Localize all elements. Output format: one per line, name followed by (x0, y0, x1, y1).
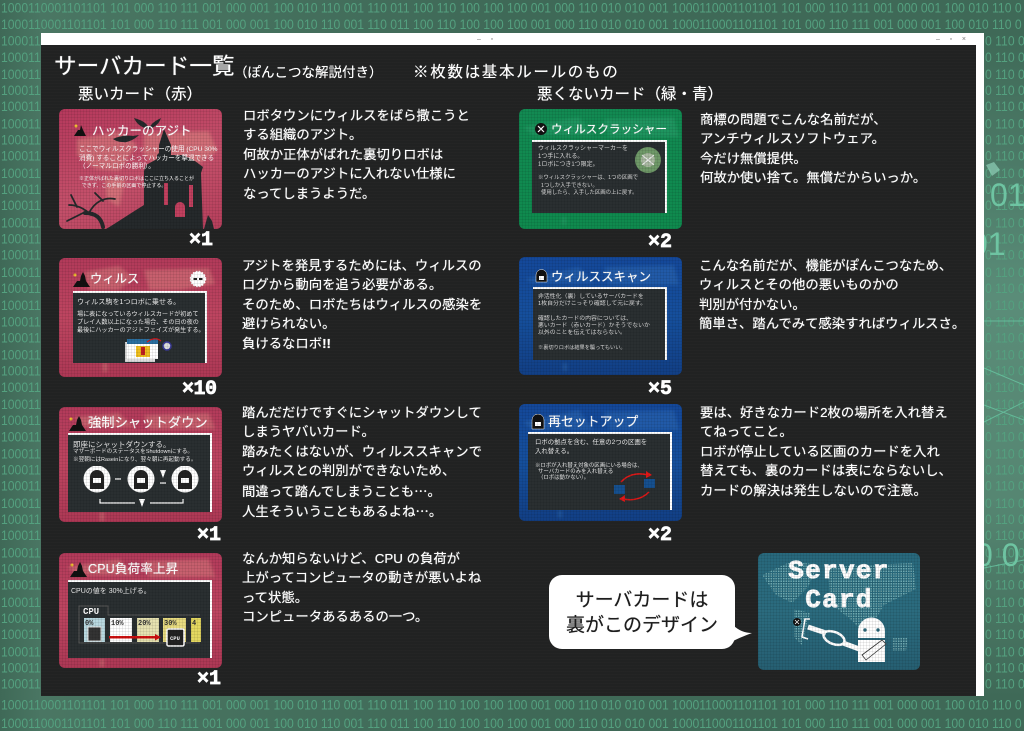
card: virus (59, 258, 222, 377)
background: binary code pattern: 1000110001101101 101 000 110 111 001 000 001 100 010 110 001 110 011 100 110 100 100 100 001 000 110 010 010 001 1000110001101101 101 000 110 111 001 000 001 100 010 110 0 1000110001101101 101 000 110 111 001 000 001 100 010 110 001 110 011 100 110 100 100 100 001 000 110 010 010 001 1000110001101101 101 000 110 111 001 000 001 100 010 110 0 (1, 0, 1022, 33)
description: virus scan: こんな名前だが、機能がぽんこつなため、 (699, 258, 952, 273)
callout: speech bubble: サーバカードは (576, 590, 708, 611)
icon: robot (532, 414, 544, 430)
CPU meter: 10% (111, 620, 124, 628)
description: re-setup: 要は、好きなカード2枚の場所を入れ替え (700, 405, 948, 420)
description: virus scan: ウィルスとその他の悪いものかの (699, 277, 899, 292)
CPU meter: CPU (83, 607, 99, 617)
diagram: swap arrows (614, 471, 655, 502)
text panel (528, 432, 672, 510)
description: CPU load increase (242, 551, 482, 624)
description: CPU load increase: コンピュータあるあるの一つ。 (242, 609, 428, 624)
description: virus scan (699, 258, 965, 331)
card: server card back (758, 553, 920, 670)
description: virus crusher: 今だけ無償提供。 (700, 151, 807, 166)
CPU meter: 4 (192, 620, 196, 628)
count x5: ×5 (648, 378, 672, 401)
description: CPU load increase: 上がってコンピュータの動きが悪いよね (242, 570, 481, 585)
text panel (73, 291, 207, 363)
icon: robot (536, 269, 548, 282)
title: Card (805, 585, 873, 615)
card: forced shutdown (59, 407, 222, 522)
description: forced shutdown: 間違って踏んでしまうことも…。 (242, 481, 441, 500)
CPU meter: 0% (85, 620, 94, 628)
description: forced shutdown: ウィルスとの判別ができないため、 (242, 463, 455, 478)
description: re-setup: ロボが停止している区画のカードを入れ (700, 444, 940, 459)
icon: robot with crusher (793, 618, 886, 662)
count x2: ×2 (648, 524, 672, 547)
title: CPU負荷率上昇 (88, 562, 178, 576)
text panel: 非活性化（裏）しているサーバカードを 1枚自分だけこっそり確認して元に戻す。 確認したカードの内容については、 悪いカード（赤いカード）かそうでないか 以外のことを伝えてはならない。 ※裏切りロボは結果を騙ってもいい。 (538, 294, 650, 351)
diagram: shutdown cycle (84, 466, 198, 507)
text panel: マザーボードのステータスをShutdownにする。 ※翌朝にはRaseinになり、翌々朝に再起動する。 (73, 449, 196, 463)
background: binary code pattern: 0 0 (975, 537, 1019, 573)
CPU meter: 20% (138, 620, 151, 628)
CPU meter: CPU (170, 635, 180, 642)
window controls right: – ▫ × (936, 36, 966, 43)
description: forced shutdown: 人生そういうこともあるよね…。 (242, 501, 442, 520)
background: binary code pattern: 1000110001101101 101 000 110 111 001 000 001 100 010 110 001 110 011 100 110 100 100 100 001 000 110 010 010 001 1000110001101101 101 000 110 111 001 000 001 100 010 110 0 1000110001101101 101 000 110 111 001 000 001 100 010 110 001 110 011 100 110 100 100 100 001 000 110 010 010 001 1000110001101101 101 000 110 111 001 000 001 100 010 110 0 (1, 697, 1022, 731)
description: forced shutdown: しまうヤバいカード。 (242, 424, 375, 439)
title (788, 556, 890, 615)
text panel (533, 287, 667, 360)
icon: hacker house (73, 272, 90, 287)
description: virus: 避けられない。 (242, 316, 335, 331)
text panel (68, 580, 212, 658)
text panel: ロボの拠点を含む、任意の2つの区画を 入れ替える。 (535, 439, 647, 454)
heading: not bad cards: 悪くないカード（緑・青） (537, 86, 723, 103)
count x1: ×1 (197, 524, 221, 547)
description: virus crusher (700, 112, 926, 185)
title: ウィルスクラッシャー (551, 123, 667, 136)
rules text: ここでウィルスクラッシャーの使用 (CPU 30% 消費) することによってハッカーを撃退できる （ノーマルロボの勝利）。 (79, 146, 217, 170)
icon: crusher (535, 123, 547, 135)
text panel: ※ロボが入れ替え対象の区画にいる場合は、 サーバカードのみを入れ替える （ロボは動かない）。 (535, 463, 643, 481)
title: 再セットアップ (548, 414, 638, 429)
card: hacker hideout (59, 109, 222, 229)
description: virus scan: 簡単さ、踏んでみて感染すればウィルスさ。 (699, 316, 965, 331)
description: re-setup: 替えても、裏のカードは表にならないし、 (700, 463, 952, 478)
title: （ぽんこつな解説付き） (234, 65, 382, 80)
description: hacker hideout: ハッカーのアジトに入れない仕様に (243, 166, 456, 181)
CPU meter (78, 606, 201, 647)
icon: hacker house (70, 562, 87, 577)
description: forced shutdown (242, 405, 482, 520)
description: virus crusher: アンチウィルスソフトウェア。 (700, 131, 885, 146)
CPU meter: 30% (164, 620, 177, 628)
icon: crusher marker (635, 147, 661, 173)
description: virus: 負けるなロボ!! (242, 336, 331, 351)
description: forced shutdown: 踏みたくはないが、ウィルススキャンで (242, 444, 482, 459)
text panel: 即座にシャットダウンする。 (73, 440, 170, 449)
world map (76, 130, 217, 206)
text panel: ※ウィルスクラッシャーは、1つの区画で 1つしか入手できない。 使用したら、入手した区画の上に戻す。 (538, 175, 638, 196)
title: ウィルス (90, 272, 139, 286)
description: hacker hideout: する組織のアジト。 (243, 127, 362, 142)
world map (68, 558, 215, 668)
count x1: ×1 (197, 668, 221, 691)
count x2: ×2 (648, 231, 672, 254)
description: virus crusher: 何故か使い捨て。無償だからいっか。 (700, 170, 926, 185)
count x10: ×10 (182, 378, 217, 401)
card: virus crusher (519, 109, 682, 229)
world map (529, 266, 678, 370)
count x1: ×1 (189, 229, 213, 252)
description: virus: ログから動向を追う必要がある。 (242, 277, 442, 292)
text panel (532, 140, 667, 213)
title (54, 54, 619, 81)
world map (526, 410, 678, 518)
description: CPU load increase: なんか知らないけど、CPU の負荷が (242, 551, 460, 566)
description: hacker hideout: 何故か正体がばれた裏切りロボは (243, 147, 443, 162)
text panel: ウィルス駒を1つロボに乗せる。 (77, 298, 180, 306)
description: re-setup (700, 405, 952, 498)
title: ウィルススキャン (551, 270, 651, 284)
card: virus scan (519, 257, 682, 375)
description: forced shutdown: 踏んだだけですぐにシャットダウンして (242, 405, 482, 420)
title: ※枚数は基本ルールのもの (413, 64, 619, 81)
rules text: ※正体がばれた裏切りロボはここに立ち入ることが できず、この手前の区画で停止する。 (79, 176, 194, 189)
description: re-setup: てねってこと。 (700, 424, 793, 439)
description: virus crusher: 商標の問題でこんな名前だが、 (700, 112, 887, 127)
description: virus scan: 判別が付かない。 (699, 297, 806, 312)
title: Server (788, 556, 890, 586)
window controls left: – ▫ (477, 36, 493, 43)
text panel (68, 433, 212, 512)
icon: haunted house (66, 118, 214, 229)
icon: cards and virus (125, 338, 172, 362)
description: hacker hideout (243, 108, 470, 201)
description: re-setup: カードの解決は発生しないので注意。 (700, 483, 927, 498)
heading: bad cards: 悪いカード（赤） (78, 86, 202, 103)
card: CPU load increase (59, 553, 222, 668)
world map (763, 561, 916, 651)
text panel: CPUの値を 30%上げる。 (71, 588, 151, 595)
world map (84, 266, 215, 372)
icon: virus (190, 270, 206, 288)
description: virus: そのため、ロボたちはウィルスの感染を (242, 297, 482, 312)
icon: hacker house (69, 416, 86, 431)
description: hacker hideout: ロボタウンにウィルスをばら撒こうと (243, 108, 470, 123)
description: virus: アジトを発見するためには、ウィルスの (242, 258, 482, 273)
title: サーバカード一覧 (54, 54, 235, 79)
title: ハッカーのアジト (92, 124, 192, 138)
world map (75, 412, 215, 522)
card: re-setup (519, 404, 682, 521)
description: CPU load increase: って状態。 (242, 590, 308, 605)
background: binary code pattern: 01 (970, 226, 1006, 262)
description: hacker hideout: なってしまうようだ。 (243, 186, 375, 201)
description: virus (242, 258, 482, 351)
text panel: ウィルスクラッシャーマーカーを 1つ手に入れる。 1ロボにつき1つ限定。 (538, 146, 628, 168)
callout: speech bubble (549, 575, 752, 649)
callout: speech bubble: 裏がこのデザイン (566, 615, 718, 636)
rules text (79, 145, 218, 189)
text panel: 場に表になっているウィルスカードが初めて プレイ人数以上になった場合、その日の夜の 最後にハッカーのアジトフェイズが発生する。 (77, 311, 205, 334)
title: 強制シャットダウン (88, 415, 208, 430)
world map (526, 118, 678, 224)
